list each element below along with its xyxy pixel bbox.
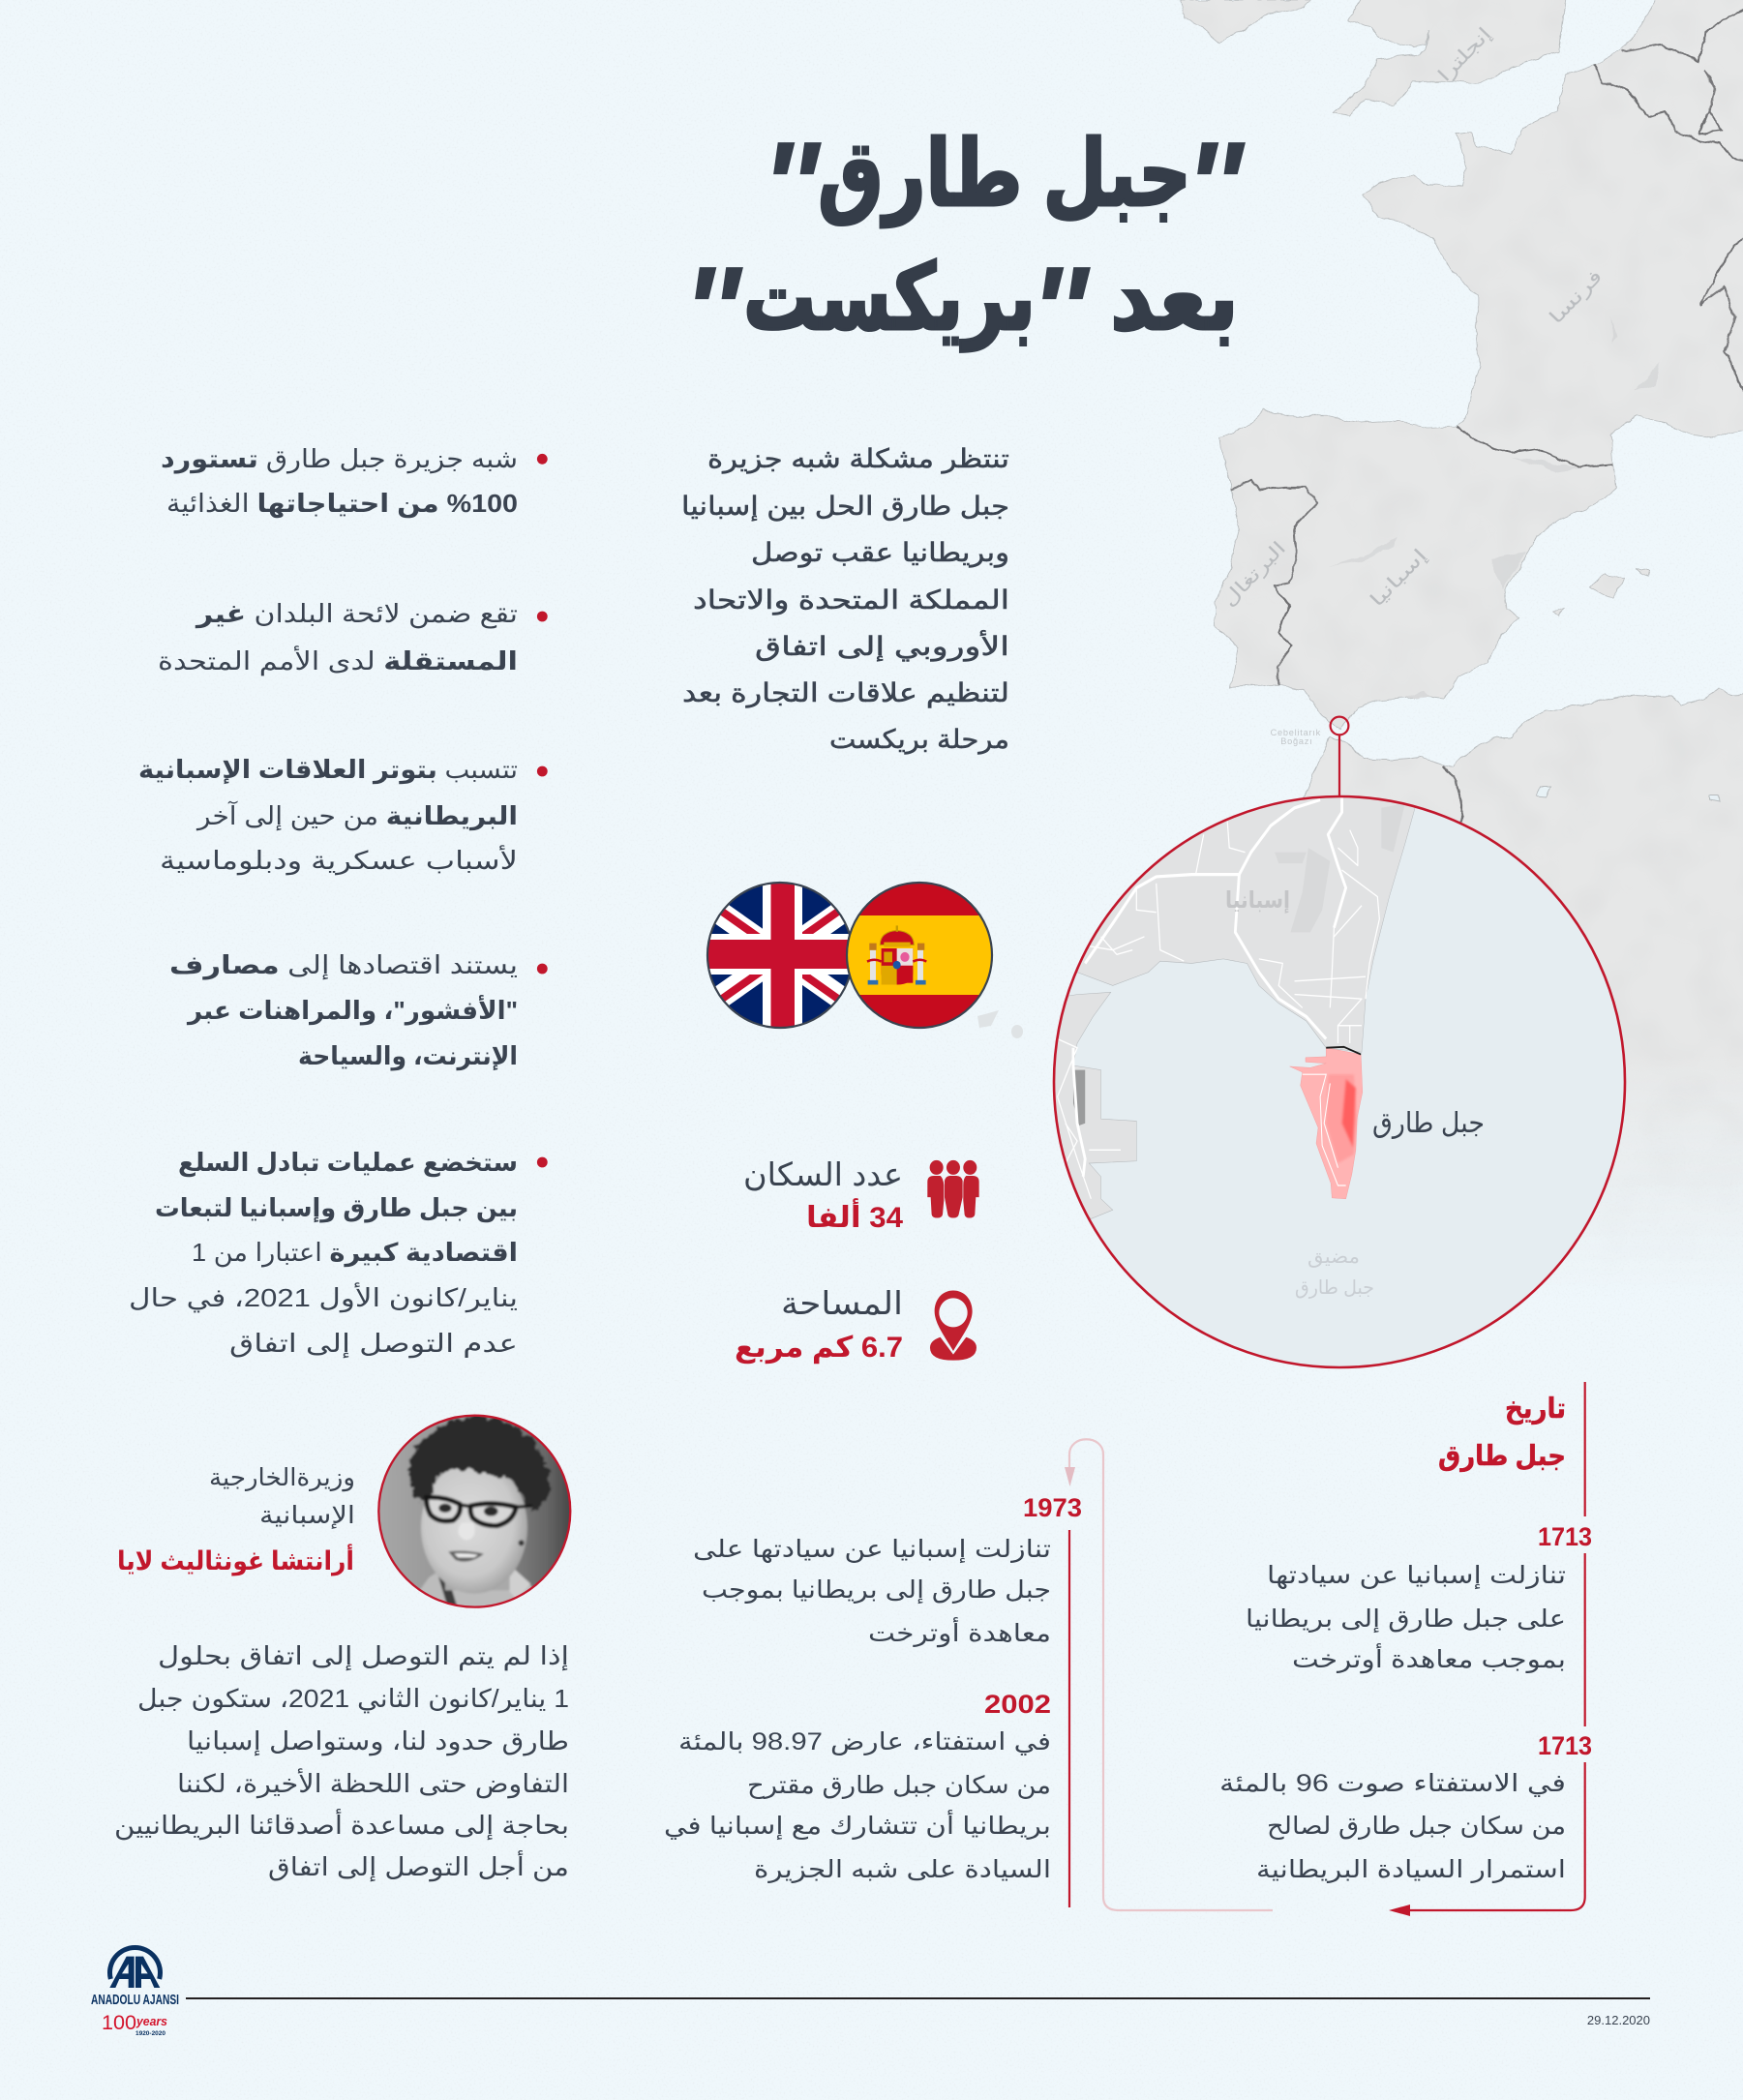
map: France and central Europe bbox=[1364, 0, 1743, 467]
icon: people bbox=[927, 1160, 979, 1218]
bullet: food imports: %100 من احتياجاتها الغذائية bbox=[166, 489, 518, 519]
timeline entry: 1713 referendum: في الاستفتاء صوت 96 بالمئة bbox=[1219, 1770, 1566, 1797]
quote paragraph: طارق حدود لنا، وستواصل إسبانيا bbox=[187, 1726, 569, 1756]
map: landmasses of western Europe and North Africa bbox=[1181, 0, 1743, 1306]
portrait caption: أرانتشا غونثاليث لايا bbox=[117, 1544, 354, 1576]
inset label: Spain: إسبانيا bbox=[1225, 887, 1290, 914]
map labels bbox=[1218, 23, 1607, 746]
stat: area: المساحة bbox=[781, 1285, 903, 1321]
footer rule bbox=[186, 1997, 1650, 1999]
stat: area: 6.7 كم مربع bbox=[735, 1332, 903, 1365]
inset label: strait bbox=[1295, 1246, 1374, 1299]
bullet: non-self-governing: المستقلة لدى الأمم المتحدة bbox=[158, 645, 518, 676]
icon: small islands decoration bbox=[977, 1010, 1023, 1038]
timeline entry: 1713 referendum: استمرار السيادة البريطانية bbox=[1256, 1856, 1566, 1883]
title: بريكست bbox=[743, 247, 1036, 351]
panel: zoomed map circle bbox=[1049, 777, 1625, 1367]
timeline: pale connector bbox=[1065, 1439, 1273, 1910]
flag: United Kingdom bbox=[706, 881, 850, 1030]
quote paragraph: إذا لم يتم التوصل إلى اتفاق بحلول bbox=[158, 1641, 569, 1671]
timeline entry: 2002: في استفتاء، عارض 98.97 بالمئة bbox=[678, 1728, 1051, 1755]
timeline: red connector right bbox=[1389, 1382, 1585, 1916]
stat: area bbox=[735, 1285, 977, 1365]
map: North Africa bbox=[1302, 689, 1743, 1306]
title: جبل طارق bbox=[818, 123, 1191, 227]
map label: England: إنجلترا bbox=[1434, 23, 1496, 87]
bullet: food imports bbox=[161, 444, 548, 519]
bullet: non-self-governing: تقع ضمن لائحة البلدان غير bbox=[195, 599, 518, 629]
quote paragraph bbox=[114, 1641, 569, 1882]
map: Iberia bbox=[1216, 409, 1615, 730]
quote paragraph: من أجل التوصل إلى اتفاق bbox=[268, 1849, 569, 1882]
inset label: strait: جبل طارق bbox=[1295, 1277, 1374, 1299]
timeline heading: تاريخ bbox=[1505, 1394, 1566, 1425]
intro paragraph: لتنظيم علاقات التجارة بعد bbox=[682, 678, 1009, 708]
bullet: economy: "الأفشور"، والمراهنات عبر bbox=[186, 995, 518, 1026]
title: " bbox=[681, 240, 743, 382]
map: Great Britain bbox=[1334, 0, 1566, 116]
stat: population: 34 ألفا bbox=[806, 1198, 903, 1234]
bullet: economy bbox=[169, 950, 548, 1071]
portrait caption: الإسبانية bbox=[259, 1502, 355, 1529]
inset land and roads bbox=[1049, 777, 1421, 1218]
bullet: trade exchanges: اقتصادية كبيرة اعتبارا من 1 bbox=[192, 1238, 518, 1268]
Gibraltar territory bbox=[1290, 1047, 1363, 1199]
bullet: food imports: شبه جزيرة جبل طارق تستورد bbox=[161, 444, 518, 474]
timeline entry: 2002: السيادة على شبه الجزيرة bbox=[754, 1856, 1051, 1883]
map label: Strait of Gibraltar (Turkish) bbox=[1271, 728, 1321, 746]
logo: Anadolu Agency: ANADOLU AJANSI bbox=[91, 1992, 179, 2008]
stat: population: عدد السكان bbox=[743, 1156, 903, 1192]
portrait caption: وزيرةالخارجية bbox=[209, 1464, 355, 1492]
logo: Anadolu Agency: 1920-2020 bbox=[135, 2030, 165, 2037]
title: بعد bbox=[1110, 247, 1239, 349]
timeline entry: 1973: 1973 bbox=[1023, 1493, 1082, 1522]
intro paragraph: مرحلة بريكست bbox=[829, 725, 1009, 755]
intro paragraph: الأوروبي إلى اتفاق bbox=[755, 629, 1009, 662]
logo: Anadolu Agency bbox=[91, 1947, 179, 2037]
bullet: tensions: البريطانية من حين إلى آخر bbox=[195, 800, 518, 831]
timeline entry: 1713 treaty bbox=[1246, 1522, 1592, 1674]
bullet: economy: الإنترنت، والسياحة bbox=[298, 1041, 518, 1071]
bullet: non-self-governing bbox=[158, 599, 548, 676]
bullet: economy: يستند اقتصادها إلى مصارف bbox=[169, 950, 518, 980]
map: Ireland bbox=[1181, 0, 1310, 42]
stat: population bbox=[743, 1156, 979, 1234]
title: " bbox=[1029, 240, 1091, 382]
inset label: strait: مضيق bbox=[1307, 1246, 1360, 1268]
timeline heading: جبل طارق bbox=[1438, 1441, 1566, 1472]
bullet: tensions: لأسباب عسكرية ودبلوماسية bbox=[160, 844, 518, 876]
bullet: tensions: تتسبب بتوتر العلاقات الإسبانية bbox=[138, 755, 518, 785]
timeline entry: 2002 bbox=[664, 1690, 1051, 1883]
title: " bbox=[1184, 115, 1246, 257]
timeline entry: 2002: بريطانيا أن تتشارك مع إسبانيا في bbox=[664, 1809, 1051, 1841]
map label: Portugal: البرتغال bbox=[1218, 537, 1290, 611]
timeline entry: 1713 treaty: 1713 bbox=[1538, 1522, 1592, 1551]
timeline entry: 1973: معاهدة أوترخت bbox=[868, 1616, 1051, 1648]
timeline entry: 1973 bbox=[693, 1493, 1082, 1648]
icon: map pin bbox=[930, 1291, 977, 1361]
map: country borders bbox=[1232, 10, 1743, 685]
icon: Spanish coat of arms bbox=[867, 925, 926, 984]
inset label: Gibraltar: جبل طارق bbox=[1372, 1108, 1485, 1139]
quote paragraph: 1 يناير/كانون الثاني 2021، ستكون جبل bbox=[137, 1684, 569, 1714]
intro paragraph: المملكة المتحدة والاتحاد bbox=[693, 585, 1009, 615]
intro paragraph: وبريطانيا عقب توصل bbox=[751, 538, 1009, 568]
map: terrain shading bbox=[1329, 316, 1660, 699]
bullet: tensions bbox=[138, 755, 548, 876]
quote paragraph: التفاوض حتى اللحظة الأخيرة، لكننا bbox=[177, 1767, 569, 1799]
map label: France: فرنسا bbox=[1545, 265, 1607, 328]
map label: Strait of Gibraltar (Turkish): Cebelitarık bbox=[1271, 728, 1321, 737]
date: 29.12.2020 bbox=[1587, 2013, 1650, 2027]
timeline entry: 1713 referendum: من سكان جبل طارق لصالح bbox=[1267, 1813, 1566, 1841]
map label: Strait of Gibraltar (Turkish): Boğazı bbox=[1280, 736, 1312, 746]
timeline entry: 1973: جبل طارق إلى بريطانيا بموجب bbox=[702, 1576, 1051, 1605]
timeline entry: 1713 referendum bbox=[1219, 1731, 1592, 1883]
bullet: trade exchanges: يناير/كانون الأول 2021، في حال bbox=[129, 1281, 518, 1313]
title: " bbox=[760, 115, 822, 257]
intro paragraph: جبل طارق الحل بين إسبانيا bbox=[681, 492, 1009, 522]
map label: Spain: إسبانيا bbox=[1367, 545, 1432, 612]
portrait: Arancha Gonzalez Laya bbox=[375, 1410, 578, 1613]
timeline entry: 1713 treaty: على جبل طارق إلى بريطانيا bbox=[1246, 1605, 1566, 1634]
flag: Spain bbox=[846, 881, 993, 1030]
intro paragraph bbox=[681, 444, 1009, 755]
bullet: trade exchanges: بين جبل طارق وإسبانيا لتبعات bbox=[155, 1193, 518, 1223]
timeline entry: 1973: تنازلت إسبانيا عن سيادتها على bbox=[693, 1536, 1051, 1564]
circle outline bbox=[1054, 796, 1625, 1367]
map: Balearic islands bbox=[1554, 569, 1649, 616]
timeline entry: 2002: من سكان جبل طارق مقترح bbox=[747, 1772, 1051, 1799]
bullet list bbox=[129, 444, 548, 1359]
timeline entry: 1713 treaty: بموجب معاهدة أوترخت bbox=[1292, 1642, 1566, 1674]
bullet: trade exchanges bbox=[129, 1148, 548, 1359]
timeline entry: 1713 treaty: تنازلت إسبانيا عن سيادتها bbox=[1267, 1562, 1566, 1590]
logo: Anadolu Agency: 100 bbox=[102, 2012, 136, 2034]
timeline heading bbox=[1438, 1394, 1566, 1472]
logo: Anadolu Agency: years bbox=[135, 2014, 167, 2028]
title bbox=[681, 115, 1246, 382]
timeline: red connector left bbox=[1068, 1530, 1070, 1907]
bullet: trade exchanges: ستخضع عمليات تبادل السلع bbox=[178, 1148, 518, 1178]
quote paragraph: بحاجة إلى مساعدة أصدقائنا البريطانيين bbox=[114, 1808, 569, 1841]
bullet: trade exchanges: عدم التوصل إلى اتفاق bbox=[229, 1329, 518, 1359]
intro paragraph: تنتظر مشكلة شبه جزيرة bbox=[707, 444, 1009, 474]
callout: locator ring and connector bbox=[1331, 717, 1348, 796]
portrait caption bbox=[117, 1464, 355, 1576]
timeline entry: 1713 referendum: 1713 bbox=[1538, 1731, 1592, 1760]
timeline entry: 2002: 2002 bbox=[984, 1690, 1051, 1719]
